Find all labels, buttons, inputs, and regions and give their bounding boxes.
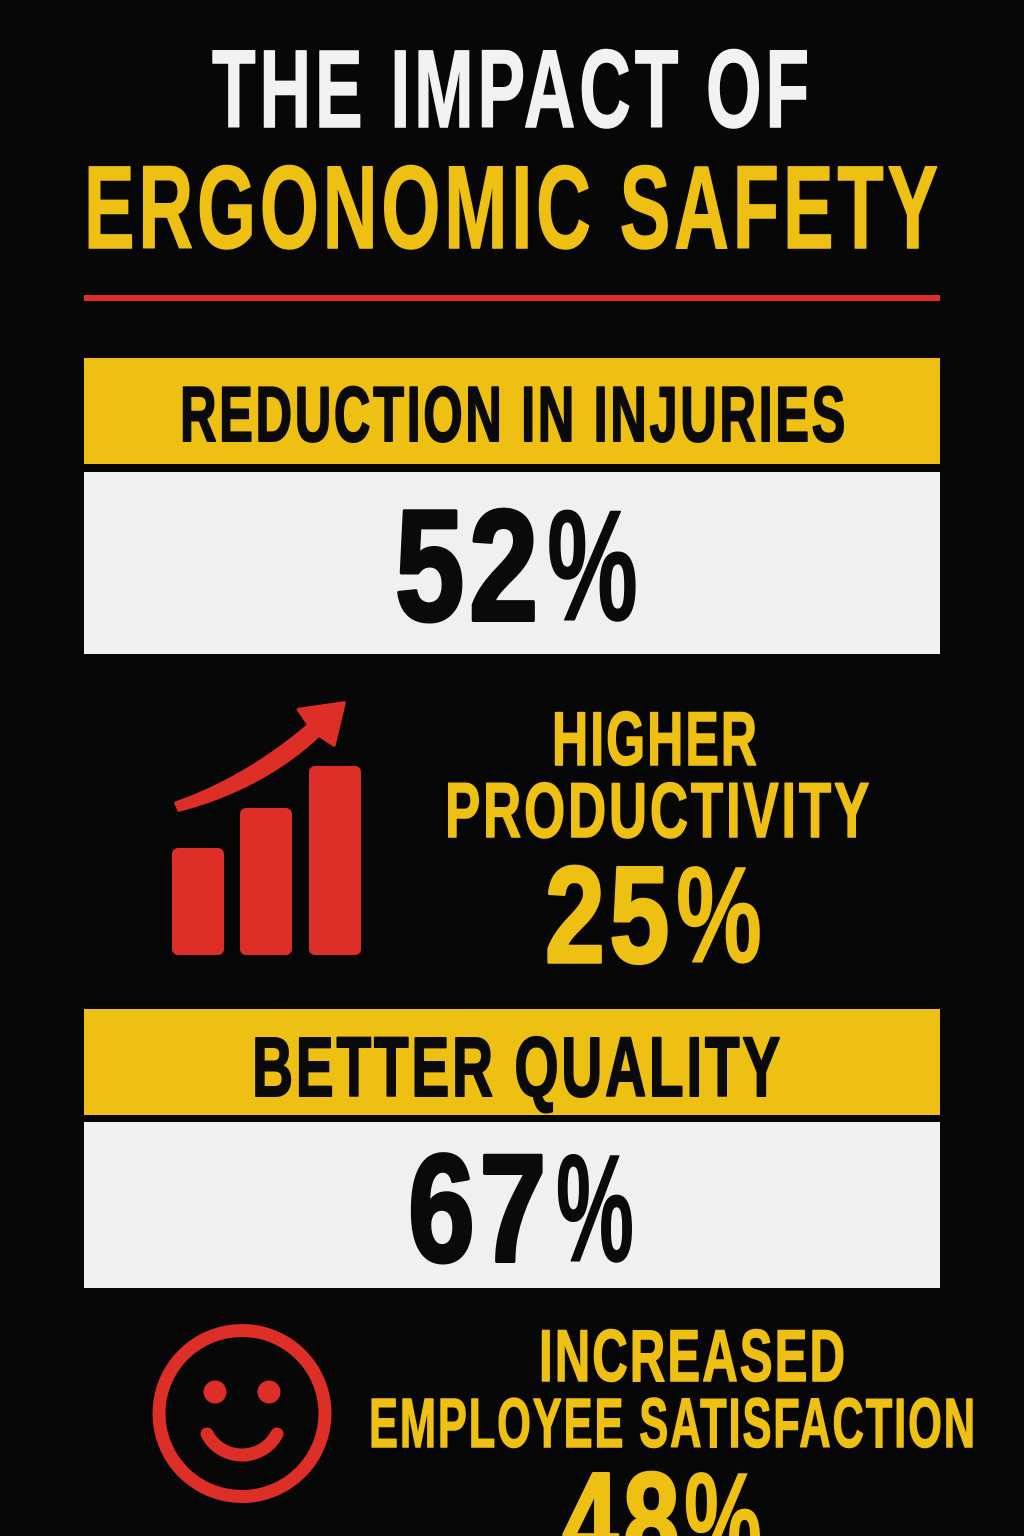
panel: better quality: % bbox=[556, 1123, 634, 1294]
stat: higher productivity: HIGHER bbox=[552, 697, 759, 782]
panel: reduction in injuries bbox=[84, 358, 940, 654]
stat: higher productivity: 25 bbox=[545, 839, 674, 992]
stat: higher productivity bbox=[445, 697, 872, 992]
stat: increased employee satisfaction: INCREASED bbox=[539, 1316, 847, 1397]
panel: reduction in injuries: 52 bbox=[395, 478, 543, 654]
icon: smiley face bbox=[159, 1330, 325, 1496]
stat: increased employee satisfaction bbox=[369, 1316, 977, 1536]
panel: better quality: BETTER QUALITY bbox=[252, 1020, 783, 1114]
title bbox=[84, 28, 942, 274]
panel: better quality bbox=[84, 1009, 940, 1294]
stat: higher productivity: % bbox=[676, 839, 762, 992]
icon: rising bar chart with arrow bbox=[172, 703, 361, 955]
panel: better quality: 67 bbox=[408, 1123, 551, 1294]
panel: reduction in injuries: % bbox=[547, 478, 638, 654]
